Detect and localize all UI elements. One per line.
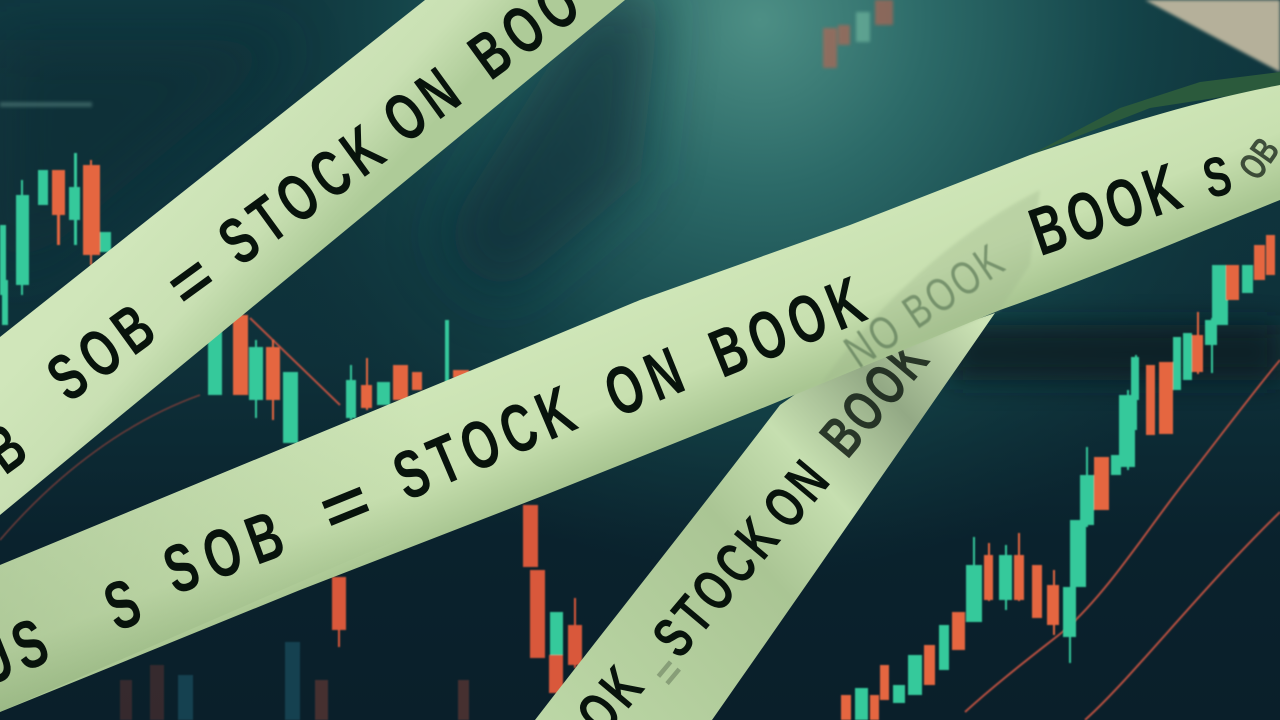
chart: candlesticks left cluster <box>0 153 111 325</box>
chart: faded candles at top <box>823 0 893 68</box>
ribbon: lower right strip <box>535 313 995 720</box>
text: book on right of main strip: BOOK <box>1020 148 1194 271</box>
text: stock on main strip: STOCK <box>383 369 592 515</box>
chart: red moving average lines <box>0 318 1280 720</box>
chart: candlesticks middle cluster <box>208 292 469 443</box>
text: book on main strip: BOOK <box>699 260 882 392</box>
text: equals on main strip: = <box>309 461 382 550</box>
text: on on upper strip: ON <box>369 49 478 157</box>
text: ghost letters showing through main strip: NO BOOK <box>835 233 1015 378</box>
text: equals on upper strip: = <box>153 240 229 322</box>
text: faded equals on lower strip: = <box>644 650 694 696</box>
text: s at right edge: S <box>1197 144 1238 211</box>
decorative: top-right light corner <box>1145 0 1280 72</box>
text: sob on main strip: SOB <box>154 493 303 609</box>
text: book on lower strip: BOOK <box>807 325 943 469</box>
text: single s: S <box>94 564 151 646</box>
text: stock on lower strip: STOCK <box>640 503 794 669</box>
text: sob on upper strip: SOB <box>34 285 174 415</box>
text: on on lower strip: ON <box>750 445 844 540</box>
text: stock on upper strip: STOCK <box>205 107 402 279</box>
text: on on main strip: ON <box>594 330 701 432</box>
chart: candlesticks lower cluster <box>120 505 582 720</box>
ribbon: upper left strip <box>0 0 625 515</box>
chart: candlesticks rising right cluster <box>841 235 1275 720</box>
